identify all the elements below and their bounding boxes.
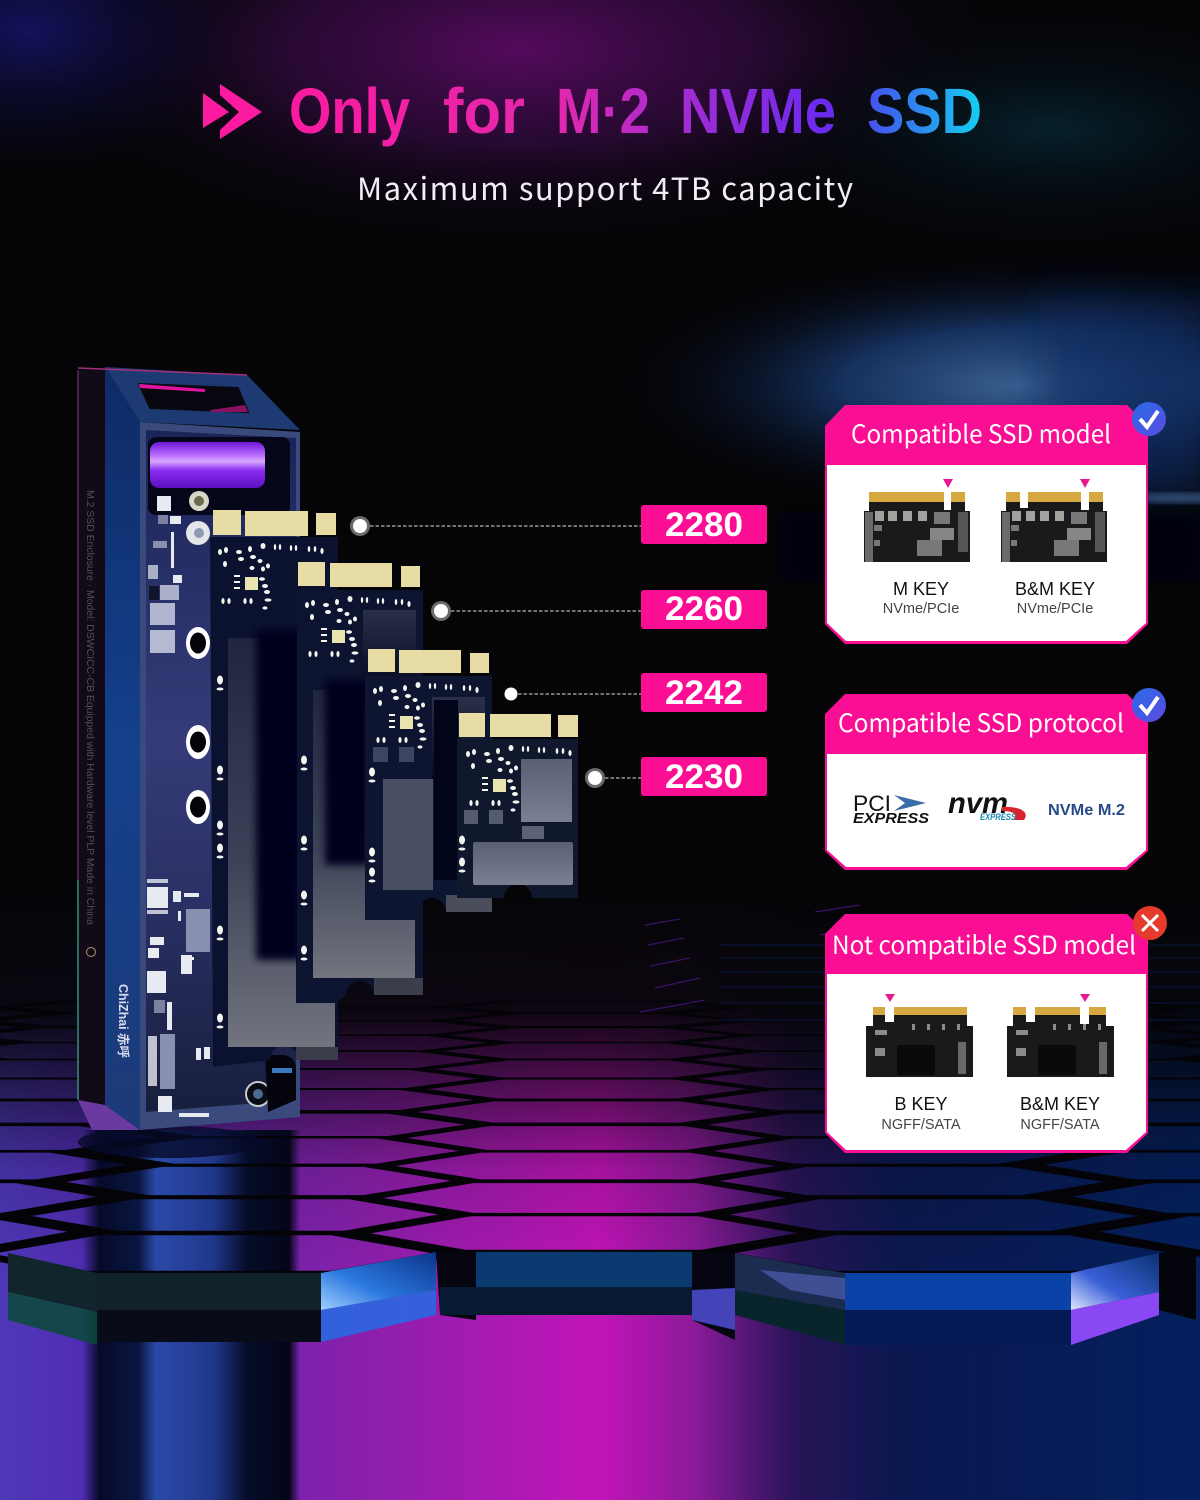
title: for bbox=[443, 75, 525, 147]
screws and holes bbox=[186, 491, 296, 1112]
label 2230: 2230 bbox=[665, 758, 743, 796]
chip bbox=[228, 638, 335, 1047]
panel heading: Not compatible SSD model bbox=[832, 926, 1136, 962]
enclosure reflection on floor bbox=[82, 1130, 300, 1500]
enclosure base shadow bbox=[78, 1126, 262, 1158]
panel heading: Compatible SSD protocol bbox=[838, 704, 1124, 740]
label 2280 bbox=[350, 505, 767, 544]
B&M KEY card: B&M KEY bbox=[1015, 579, 1095, 599]
enclosure blue side bbox=[105, 367, 140, 1130]
board bbox=[365, 676, 492, 912]
enclosure top chamfer bbox=[105, 367, 300, 430]
label 2242 bbox=[504, 673, 767, 712]
title: SSD bbox=[867, 75, 982, 147]
components bbox=[373, 682, 479, 749]
label 2260 bbox=[431, 590, 767, 629]
hexagonal platforms bbox=[8, 1250, 1196, 1345]
SSD 2260 card bbox=[297, 562, 423, 1003]
title bbox=[289, 75, 982, 147]
title icon: double chevron bbox=[203, 84, 262, 139]
contacts bbox=[298, 562, 420, 587]
B&M KEY NGFF card: B&M KEY bbox=[1020, 1094, 1100, 1114]
label 2230 bbox=[585, 757, 767, 796]
B KEY card: B KEY bbox=[894, 1094, 948, 1114]
subtitle: Maximum support 4TB capacity bbox=[357, 164, 853, 209]
battery bay bbox=[148, 437, 290, 515]
B&M KEY card: NVme/PCIe bbox=[1017, 601, 1093, 617]
contacts bbox=[368, 649, 489, 673]
registered mark bbox=[86, 948, 96, 956]
PCI Express logo: PCI bbox=[853, 791, 891, 816]
label 2242: 2242 bbox=[665, 674, 743, 712]
label 2260: 2260 bbox=[665, 590, 743, 628]
title: M·2 bbox=[556, 75, 650, 147]
panel heading: Compatible SSD model bbox=[851, 415, 1111, 451]
panel: compatible SSD model bbox=[825, 402, 1166, 644]
NVM Express logo: nvm bbox=[948, 787, 1008, 820]
contacts bbox=[459, 713, 578, 737]
B KEY card: NGFF/SATA bbox=[881, 1117, 961, 1133]
board bbox=[210, 537, 338, 1067]
board bbox=[297, 590, 423, 1003]
B KEY card bbox=[866, 994, 973, 1133]
icon: check badge bbox=[1132, 402, 1166, 436]
components bbox=[305, 596, 411, 663]
B&M KEY card bbox=[1001, 479, 1107, 617]
brand text: ChiZhai 赤呼 bbox=[116, 984, 130, 1058]
B&M KEY NGFF card bbox=[1007, 994, 1114, 1133]
panel: compatible SSD protocol bbox=[825, 688, 1166, 870]
chips bbox=[363, 610, 416, 685]
purple capacitor bbox=[150, 442, 265, 488]
NVMe M.2 label: NVMe M.2 bbox=[1048, 802, 1125, 819]
enclosure side text: M.2 SSD Enclosure · Model: DSWCICC-CB Equipped with Hardware level PLP Made in China bbox=[84, 490, 96, 925]
enclosure front frame bbox=[140, 422, 300, 1130]
hexagonal floor bbox=[0, 895, 1200, 1500]
enclosure plate bbox=[146, 430, 296, 1112]
PCI Express logo bbox=[853, 791, 929, 827]
icon: cross badge bbox=[1133, 906, 1167, 940]
board bbox=[457, 739, 578, 898]
chips bbox=[521, 759, 572, 822]
icon: check badge bbox=[1132, 688, 1166, 722]
title: Only bbox=[289, 75, 410, 147]
enclosure base wedge bbox=[78, 1100, 140, 1130]
NVM Express logo: EXPRESS bbox=[980, 812, 1017, 823]
M KEY card: M KEY bbox=[893, 579, 949, 599]
SSD 2280 card bbox=[210, 510, 338, 1067]
title: NVMe bbox=[680, 75, 836, 147]
chips bbox=[432, 697, 485, 779]
M KEY card bbox=[864, 479, 970, 617]
M KEY card: NVme/PCIe bbox=[883, 601, 959, 617]
components bbox=[218, 543, 324, 610]
components bbox=[466, 745, 572, 812]
board components bbox=[147, 496, 210, 1117]
SSD 2230 card bbox=[457, 713, 578, 898]
label 2280: 2280 bbox=[665, 506, 743, 544]
enclosure dark side strip bbox=[78, 367, 105, 1105]
PCI Express logo: EXPRESS bbox=[853, 811, 929, 827]
panel: not compatible SSD model bbox=[825, 906, 1167, 1153]
carry slot bbox=[139, 384, 248, 412]
SSD 2242 card bbox=[365, 649, 492, 912]
enclosure bbox=[78, 367, 300, 1130]
B&M KEY NGFF card: NGFF/SATA bbox=[1020, 1117, 1100, 1133]
contacts bbox=[213, 510, 336, 536]
